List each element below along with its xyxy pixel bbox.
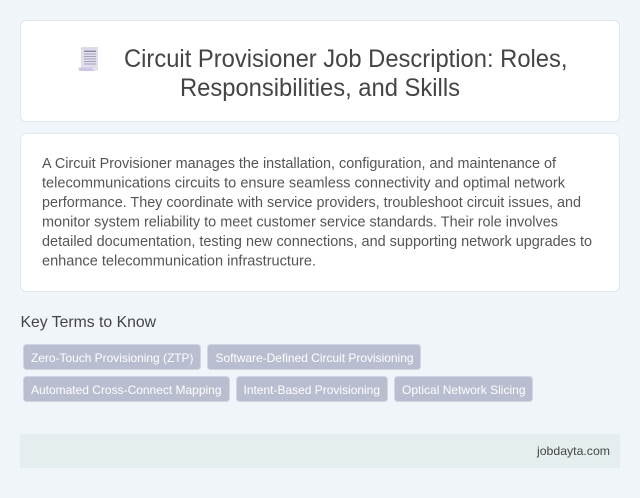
text block: description xyxy=(42,156,592,269)
panel: description xyxy=(20,134,620,292)
footer bar: jobdayta.com xyxy=(536,444,610,458)
icon: document xyxy=(79,47,98,71)
chip: Intent-Based Provisioning: Intent-Based Provisioning xyxy=(244,383,380,397)
chip: Software-Defined Circuit Provisioning xyxy=(208,344,420,370)
chip: Optical Network Slicing xyxy=(394,376,532,402)
chip: Intent-Based Provisioning xyxy=(236,376,388,402)
title xyxy=(124,45,568,102)
text block: description: monitor system reliability to meet customer service standards. Their role involves xyxy=(42,214,558,230)
text block: description: enhance telecommunication infrastructure. xyxy=(42,253,316,269)
text block: description: A Circuit Provisioner manages the installation, configuration, and maintenance of xyxy=(42,156,557,172)
chip: Automated Cross-Connect Mapping: Automated Cross-Connect Mapping xyxy=(31,383,222,397)
text block: description: telecommunications circuits to ensure seamless connectivity and optimal network xyxy=(42,175,566,191)
chip: Zero-Touch Provisioning: Zero-Touch Provisioning (ZTP) xyxy=(31,351,194,365)
chip: Software-Defined Circuit Provisioning: Software-Defined Circuit Provisioning xyxy=(216,351,414,365)
title: Circuit Provisioner Job Description: Roles, xyxy=(124,45,568,73)
chip: Automated Cross-Connect Mapping xyxy=(24,376,230,402)
footer bar xyxy=(20,434,620,468)
title: Responsibilities, and Skills xyxy=(180,74,460,102)
chip: Zero-Touch Provisioning xyxy=(24,344,200,370)
heading: key terms: Key Terms to Know xyxy=(20,314,156,331)
chip: Optical Network Slicing: Optical Network Slicing xyxy=(402,383,526,397)
text block: description: detailed documentation, testing new connections, and supporting network upgrades to xyxy=(42,234,592,250)
text block: description: performance. They coordinate with service providers, troubleshoot circuit issues, and xyxy=(42,195,581,211)
panel: title card xyxy=(20,20,620,122)
